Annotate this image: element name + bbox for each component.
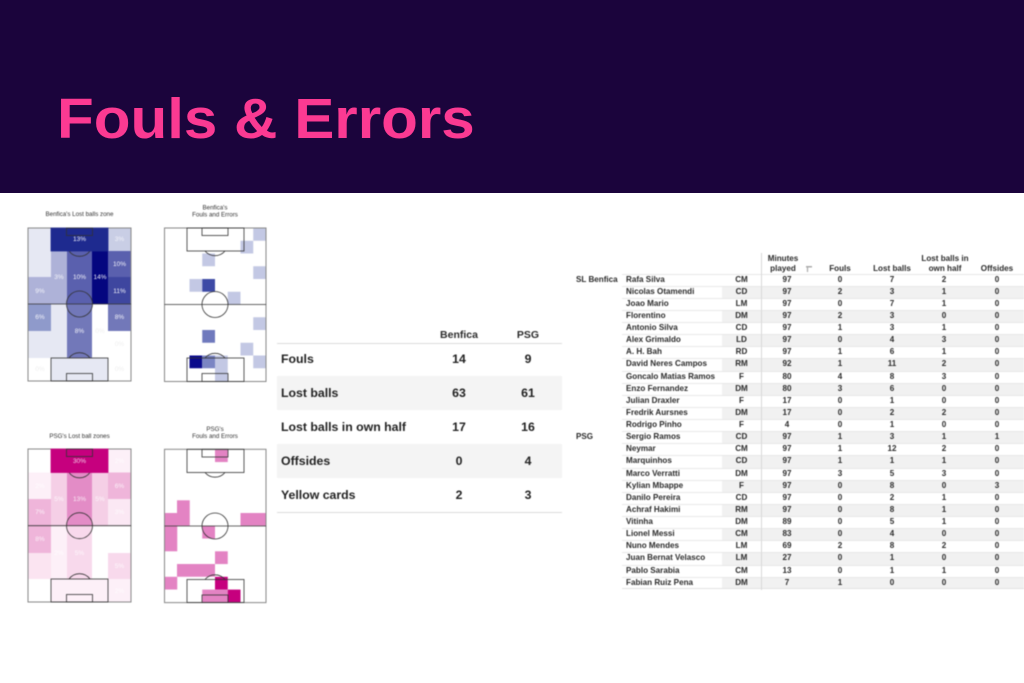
column headings: Benfica (440, 329, 478, 341)
panel: player table (576, 253, 1024, 590)
row: Yellow cards: Yellow cards (281, 488, 356, 502)
player rows: 1 (838, 347, 842, 356)
zone percentages: Benfica (35, 236, 126, 373)
row: Lost balls in own half: Lost balls in own half (281, 420, 406, 434)
player rows: 83 (782, 529, 792, 538)
panel: Benfica fouls and errors (164, 204, 266, 382)
player rows: 0 (942, 553, 946, 562)
player rows: Nuno Mendes (626, 541, 679, 550)
player rows: 3 (838, 384, 842, 393)
heading: Benfica fouls and errors: Fouls and Errors (192, 212, 238, 219)
player rows: F (739, 372, 744, 381)
player rows: RM (735, 505, 748, 514)
player rows: 0 (995, 493, 999, 502)
zone percentages: PSG: 5% (115, 563, 124, 570)
player rows: LM (736, 541, 747, 550)
row: Lost balls (277, 376, 562, 410)
player rows: Pablo Sarabia (626, 566, 680, 575)
player rows: 4 (890, 529, 894, 538)
row: Offsides: 0 (456, 454, 462, 468)
player rows: 0 (995, 384, 999, 393)
player rows: Rafa Silva (626, 274, 665, 284)
player rows: 13 (782, 566, 792, 575)
panel: PSG lost ball zones (28, 433, 131, 602)
player rows: 17 (782, 408, 792, 417)
zone percentages: Benfica: 3% (54, 274, 64, 281)
player rows: 0 (995, 347, 999, 356)
player rows: Danilo Pereira (626, 493, 680, 502)
player rows: 12 (887, 444, 896, 453)
player rows: 0 (838, 566, 842, 575)
player rows: 0 (838, 299, 842, 308)
player rows: 80 (782, 372, 792, 381)
player rows: 97 (782, 287, 792, 296)
player rows: Alex Grimaldo (626, 335, 681, 344)
player rows: 1 (995, 432, 999, 441)
player rows: F (739, 420, 744, 429)
column header: Fouls: Fouls (829, 264, 851, 273)
row: Yellow cards: 2 (456, 488, 462, 502)
player rows: 17 (782, 396, 792, 405)
player rows: 0 (995, 420, 999, 429)
zone percentages: Benfica: 8% (75, 328, 84, 335)
row: Fouls: Fouls (281, 352, 314, 366)
player rows: 0 (838, 420, 842, 429)
zone percentages: Benfica: 14% (93, 274, 107, 281)
player rows: 3 (942, 335, 946, 344)
pitch maps panel (26, 204, 268, 604)
row: Lost balls: 63 (452, 386, 466, 400)
player rows: 3 (942, 372, 946, 381)
player rows: 0 (995, 274, 999, 284)
row: Lost balls in own half (281, 420, 536, 434)
player rows: 8 (890, 505, 894, 514)
zone percentages: PSG: 0% (115, 536, 124, 543)
player rows: 2 (942, 541, 946, 550)
player rows: 80 (782, 384, 792, 393)
player rows: 3 (890, 287, 894, 296)
player rows: 1 (942, 566, 946, 575)
pitch lines: Benfica zones (28, 228, 131, 381)
team label: SL Benfica: SL Benfica (576, 275, 618, 284)
column headings: PSG (517, 329, 539, 341)
heading: Benfica lost balls zone: Benfica's Lost balls zone (46, 211, 114, 218)
player rows: Julian Draxler (626, 396, 680, 405)
player rows: 0 (995, 566, 999, 575)
player rows: 0 (838, 274, 842, 284)
zone percentages: Benfica: 10% (73, 274, 86, 281)
column header: Minutes played (768, 254, 799, 274)
player rows: DM (735, 311, 748, 320)
column header: Offsides: Offsides (981, 264, 1013, 273)
player rows: 97 (782, 323, 792, 332)
player rows: 0 (995, 553, 999, 562)
player rows: Lionel Messi (626, 529, 675, 538)
player rows: 0 (995, 456, 999, 465)
player rows: 0 (995, 517, 999, 526)
player rows: 11 (888, 359, 896, 368)
player rows: 1 (838, 444, 842, 453)
zone percentages: PSG (35, 458, 124, 595)
player rows: A. H. Bah (626, 347, 662, 356)
player rows: 1 (942, 299, 946, 308)
player rows: 0 (995, 541, 999, 550)
zone percentages: PSG: 5% (54, 496, 64, 503)
player rows: 97 (782, 444, 792, 453)
player rows: 0 (890, 578, 894, 587)
player rows: 1 (890, 456, 894, 465)
pitch lines: PSG fouls (164, 449, 266, 603)
player rows: Achraf Hakimi (626, 505, 680, 514)
player rows: 97 (782, 274, 792, 284)
zone percentages: Benfica: 6% (35, 314, 45, 321)
player rows: CD (736, 493, 747, 502)
heatmap cells: PSG (28, 449, 131, 602)
zone percentages: PSG: 2% (115, 458, 124, 465)
header band (0, 0, 1024, 193)
player rows: Fredrik Aursnes (626, 408, 688, 417)
player rows: 97 (782, 299, 792, 308)
foul cells: Benfica (190, 228, 266, 381)
player rows: 0 (995, 372, 999, 381)
player rows: 0 (942, 396, 946, 405)
player rows: 7 (890, 299, 894, 308)
player rows: CD (736, 432, 747, 441)
column header: Lost balls in own half: own half (929, 264, 961, 273)
player rows: 97 (782, 311, 792, 320)
player rows: 1 (942, 505, 946, 514)
zone percentages: PSG: 3% (115, 509, 124, 516)
row: Yellow cards (277, 478, 562, 513)
player rows: 1 (838, 578, 842, 587)
zone percentages: Benfica: 3% (115, 236, 124, 243)
player rows: 0 (942, 529, 946, 538)
player rows: 1 (890, 566, 894, 575)
player rows: F (739, 396, 744, 405)
row: Lost balls in own half: 16 (521, 420, 535, 434)
icon: sort filter (806, 266, 812, 272)
panel: PSG fouls and errors (164, 426, 266, 603)
player rows: 2 (838, 311, 842, 320)
player rows: 97 (782, 493, 792, 502)
zone percentages: Benfica: 9% (35, 288, 45, 295)
player rows: 0 (995, 529, 999, 538)
zone percentages: Benfica: 11% (113, 288, 126, 295)
player rows: 4 (785, 420, 789, 429)
player rows: 0 (995, 505, 999, 514)
player rows: Marco Verratti (626, 469, 680, 478)
player rows: 89 (782, 517, 792, 526)
column header: Lost balls: Lost balls (873, 264, 911, 273)
player rows: 1 (890, 553, 894, 562)
player rows: 1 (942, 456, 946, 465)
player rows: 0 (838, 481, 842, 490)
column header: Minutes played: played (770, 264, 796, 273)
player rows: 0 (995, 323, 999, 332)
player rows: 5 (890, 517, 894, 526)
player rows: DM (735, 578, 748, 587)
player rows: 0 (995, 396, 999, 405)
player rows: Neymar (626, 444, 656, 453)
player rows: Marquinhos (626, 456, 672, 465)
column headings (277, 325, 562, 344)
zone percentages: Benfica: 0% (95, 328, 105, 335)
row: Offsides: Offsides (281, 454, 330, 468)
player rows: LM (736, 553, 747, 562)
title: Fouls & Errors (57, 86, 475, 150)
row: Fouls (281, 352, 532, 366)
player rows: 3 (890, 432, 894, 441)
player rows: 0 (995, 469, 999, 478)
player rows: 0 (995, 359, 999, 368)
player rows: 97 (782, 335, 792, 344)
player rows: David Neres Campos (626, 359, 707, 368)
player rows: 1 (838, 323, 842, 332)
player rows: DM (735, 469, 748, 478)
player rows: 0 (942, 311, 946, 320)
player rows: 1 (890, 396, 894, 405)
player rows: CM (735, 566, 748, 575)
player rows: 6 (890, 347, 894, 356)
player rows: Fabian Ruiz Pena (626, 578, 693, 587)
zone percentages: PSG: 0% (35, 588, 45, 595)
player rows: Enzo Fernandez (626, 384, 688, 393)
heading: PSG fouls and errors: PSG's (206, 426, 224, 433)
player rows: 2 (838, 287, 842, 296)
player rows: 0 (838, 408, 842, 417)
player rows: 8 (890, 541, 894, 550)
player rows: Kylian Mbappe (626, 481, 683, 490)
player rows: 92 (782, 359, 792, 368)
player rows: 0 (995, 311, 999, 320)
pitch lines: Benfica fouls (164, 228, 266, 382)
player rows: 0 (942, 481, 946, 490)
player rows: 0 (942, 384, 946, 393)
panel: team comparison table (277, 329, 562, 514)
player rows: 3 (838, 469, 842, 478)
zone percentages: Benfica: 0% (115, 341, 124, 348)
zone percentages: PSG: 13% (73, 496, 86, 503)
player rows: Florentino (626, 311, 666, 320)
team label: PSG: PSG (576, 432, 593, 441)
player rows: 27 (782, 553, 792, 562)
pitch lines: PSG zones (28, 449, 131, 602)
player rows: 97 (782, 456, 792, 465)
player rows: DM (735, 408, 748, 417)
player rows: 69 (782, 541, 792, 550)
column header: Lost balls in own half: Lost balls in (921, 254, 969, 263)
row: Fouls: 14 (452, 352, 466, 366)
player rows: 7 (890, 274, 894, 284)
player rows: 7 (785, 578, 789, 587)
player rows: 1 (838, 359, 842, 368)
player rows: F (739, 481, 744, 490)
player rows: 1 (942, 517, 946, 526)
player rows: Rodrigo Pinho (626, 420, 682, 429)
player rows: Goncalo Matias Ramos (626, 372, 715, 381)
player rows: 97 (782, 505, 792, 514)
zone percentages: Benfica: 0% (35, 366, 45, 373)
player rows: 2 (942, 359, 946, 368)
panel: Benfica lost ball zones (28, 211, 131, 381)
player rows: LM (736, 299, 747, 308)
player rows: 2 (890, 408, 894, 417)
player rows: 4 (838, 372, 842, 381)
player rows: 6 (890, 384, 894, 393)
zone percentages: PSG: 6% (115, 483, 124, 490)
player rows: 4 (890, 335, 894, 344)
player rows: 3 (890, 323, 894, 332)
row: Offsides (277, 444, 562, 478)
player rows: 0 (995, 299, 999, 308)
player rows: 2 (890, 493, 894, 502)
player rows: LD (736, 335, 747, 344)
heading: Benfica fouls and errors: Benfica's (203, 204, 227, 212)
player rows: Joao Mario (626, 299, 669, 308)
zone percentages: Benfica: 8% (115, 314, 124, 321)
player rows: 0 (838, 517, 842, 526)
player rows: 97 (782, 469, 792, 478)
zone percentages: PSG: 0% (95, 550, 105, 557)
zone percentages: PSG: 2% (115, 588, 124, 595)
player rows: Juan Bernat Velasco (626, 553, 705, 562)
player rows: 0 (838, 505, 842, 514)
zone percentages: PSG: 8% (35, 536, 45, 543)
player rows: Sergio Ramos (626, 432, 680, 441)
player rows: 97 (782, 481, 792, 490)
player rows: 1 (890, 420, 894, 429)
player rows: 0 (942, 420, 946, 429)
player rows: CM (735, 529, 748, 538)
player rows: CM (735, 444, 748, 453)
player rows: CD (736, 287, 747, 296)
player rows: 0 (942, 578, 946, 587)
player rows: 8 (890, 372, 894, 381)
zone percentages: PSG: 5% (75, 550, 84, 557)
heatmap cells: Benfica (28, 228, 131, 381)
player rows: 2 (838, 541, 842, 550)
heading: PSG fouls and errors: Fouls and Errors (192, 433, 238, 440)
player rows: 1 (942, 323, 946, 332)
zone percentages: Benfica: 0% (115, 366, 124, 373)
row: Yellow cards: 3 (525, 488, 531, 502)
player rows: RM (735, 359, 748, 368)
player rows: 3 (890, 311, 894, 320)
column header: Minutes played: Minutes (768, 254, 798, 263)
zone percentages: PSG: 7% (35, 509, 45, 516)
player rows: 0 (838, 553, 842, 562)
foul cells: PSG (164, 449, 266, 602)
heading: PSG lost ball zones: PSG's Lost ball zones (49, 433, 110, 440)
player rows: 8 (890, 481, 894, 490)
player rows: 3 (995, 481, 999, 490)
player rows: 0 (995, 408, 999, 417)
player rows: 1 (942, 432, 946, 441)
player rows: 0 (838, 335, 842, 344)
player rows: 0 (838, 529, 842, 538)
row: Lost balls: Lost balls (281, 386, 338, 400)
zone percentages: PSG: 30% (73, 458, 86, 465)
divider: vertical column line (761, 253, 762, 590)
zone percentages: Benfica: 13% (73, 236, 86, 243)
row: Lost balls: 61 (521, 386, 535, 400)
player rows: 2 (942, 274, 946, 284)
zone percentages: Benfica: 10% (113, 261, 126, 268)
player rows: DM (735, 517, 748, 526)
player rows: 1 (942, 347, 946, 356)
row: Fouls: 9 (525, 352, 531, 366)
player rows: 5 (890, 469, 894, 478)
column header: Lost balls in own half (921, 254, 969, 273)
player rows: DM (735, 384, 748, 393)
player rows: 0 (995, 578, 999, 587)
zone percentages: PSG: 5% (95, 496, 105, 503)
player rows: CD (736, 323, 747, 332)
player rows: 97 (782, 347, 792, 356)
player rows: 2 (942, 444, 946, 453)
player rows: Antonio Silva (626, 323, 678, 332)
player rows: 3 (942, 469, 946, 478)
player rows: CD (736, 456, 747, 465)
player rows: 1 (942, 287, 946, 296)
zone percentages: PSG: 2% (54, 550, 64, 557)
player rows: 1 (838, 456, 842, 465)
row: Offsides: 4 (525, 454, 531, 468)
player rows: 1 (942, 493, 946, 502)
player rows: 0 (838, 396, 842, 405)
player rows: Nicolas Otamendi (626, 287, 694, 296)
player rows: Vitinha (626, 517, 653, 526)
player rows: 0 (995, 287, 999, 296)
zone percentages: PSG: 0% (35, 458, 45, 465)
player rows: 97 (782, 432, 792, 441)
player rows: RD (736, 347, 747, 356)
zone percentages: PSG: 2% (35, 483, 45, 490)
player rows: 0 (838, 493, 842, 502)
player rows: 0 (995, 444, 999, 453)
player rows: CM (735, 274, 748, 284)
row: Lost balls in own half: 17 (452, 420, 466, 434)
player rows: 0 (995, 335, 999, 344)
player rows: 1 (838, 432, 842, 441)
player rows: 2 (942, 408, 946, 417)
